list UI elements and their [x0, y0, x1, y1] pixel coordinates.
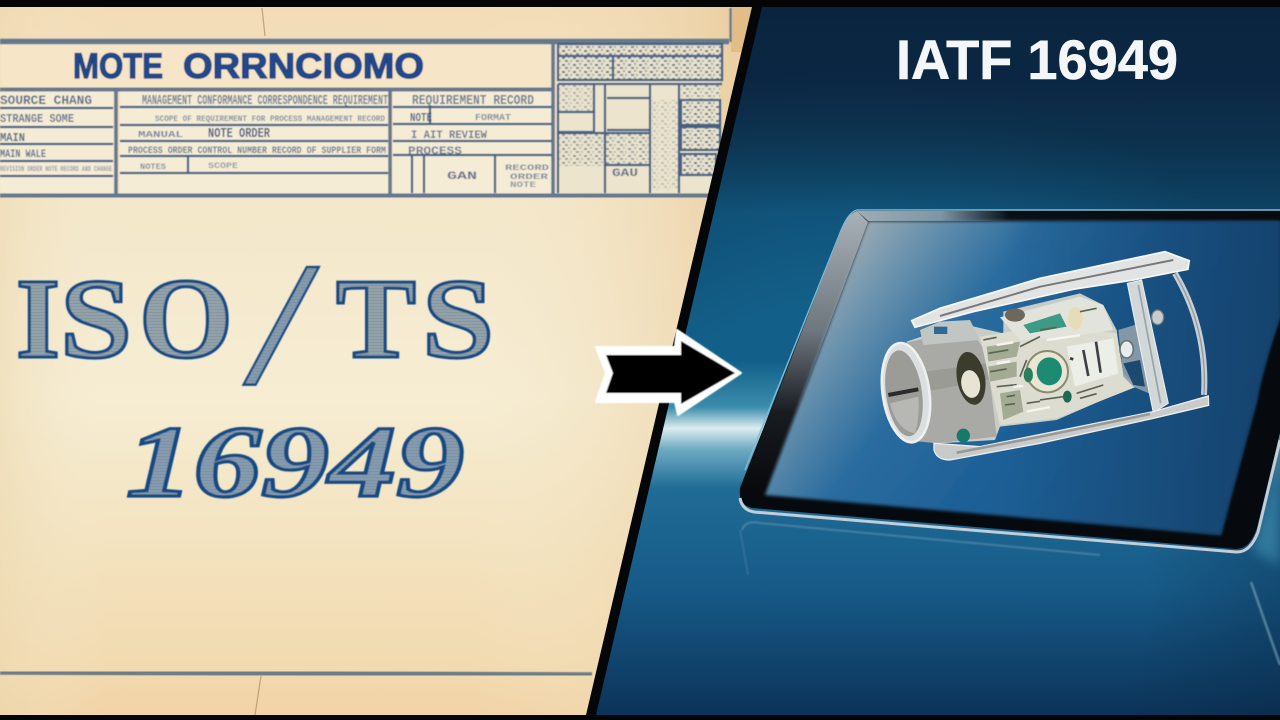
form title: MOTE [73, 47, 163, 86]
form small text: MANUAL [138, 130, 183, 140]
form small text: STRANGE SOME [0, 112, 74, 126]
panel: old paper document [0, 7, 770, 715]
light patch beside the tablet corner [1252, 450, 1280, 565]
divider: black diagonal edge [586, 7, 762, 715]
form small text: GAN [447, 171, 477, 183]
back hoop [1175, 273, 1204, 395]
slash: / [236, 227, 327, 422]
form small text: PROCESS [408, 146, 462, 158]
tablet screen [765, 221, 1280, 535]
white connector blocks [1067, 338, 1118, 387]
heading: IATF 16949: IATF 16949 [896, 28, 1178, 91]
circuit board section [980, 327, 1137, 425]
form small text: RECORD [505, 164, 549, 173]
form small text: I AIT REVIEW [411, 130, 487, 142]
tablet reflection on the floor [740, 522, 1280, 665]
arrow: from ISO/TS to IATF [596, 330, 741, 415]
panel: blue digital background [590, 7, 1280, 715]
vertical bar [1127, 280, 1168, 413]
bottom rail [934, 396, 1209, 460]
bottom black bar [0, 715, 1280, 720]
form small text: ORDER [510, 173, 548, 182]
lens ring [876, 340, 936, 445]
heading: ISO / TS: O [139, 255, 233, 382]
body shell [907, 293, 1133, 443]
form small text: FORMAT [475, 113, 512, 123]
form small text: MAIN WALE [0, 149, 46, 161]
form small text: GAU [612, 168, 638, 180]
circuit speckle [983, 308, 1103, 405]
heading: ISO / TS: S [60, 255, 132, 382]
top rail strut [920, 320, 980, 345]
form cell backgrounds [0, 44, 720, 193]
form small text: SCOPE OF REQUIREMENT FOR PROCESS MANAGEMENT RECORD [155, 115, 385, 124]
silver frame bottom and right [740, 440, 1280, 552]
form ruling lines [0, 8, 730, 196]
right bracket [1118, 323, 1157, 397]
arrow black fill [606, 341, 735, 404]
form small text [0, 93, 638, 190]
screen right shading [765, 221, 1280, 535]
form header band [0, 44, 552, 88]
form small text: SCOPE [208, 162, 238, 171]
tablet bezel [740, 210, 1280, 549]
form small text: REVISION ORDER NOTE RECORD AND CHANGE [0, 166, 112, 174]
form table at top of the paper [0, 8, 730, 196]
form small text: MANAGEMENT CONFORMANCE CORRESPONDENCE REQUIREMENT [142, 93, 388, 109]
paper bottom rule [0, 672, 592, 675]
small green dot [957, 429, 970, 443]
mechanical device on the screen [876, 252, 1209, 460]
heading: ISO / TS: S [422, 255, 494, 382]
form small text: NOTE ORDER [208, 126, 270, 142]
central green disc [1027, 351, 1068, 392]
heading: ISO / TS: I [16, 255, 60, 382]
form right block speckled cells [558, 45, 721, 190]
top light edge [745, 210, 1280, 470]
top rail [912, 252, 1189, 327]
form title [73, 47, 424, 86]
bezel left highlight [741, 211, 868, 495]
top black bar [0, 0, 1280, 7]
arrow white outline [596, 330, 741, 415]
heading: ISO / TS: T [336, 255, 416, 382]
form small text: NOTES [140, 163, 166, 172]
bezel top highlight [857, 211, 1280, 221]
form title: ORRNCIOMO [183, 47, 424, 86]
form small text: SOURCE CHANG [0, 93, 92, 108]
lens barrel [897, 328, 997, 443]
heading: 16949: 16949 [126, 406, 464, 519]
form small text: MAIN [0, 131, 25, 145]
heading: ISO / TS [16, 227, 494, 422]
form small text: REQUIREMENT RECORD [412, 93, 534, 109]
tablet [740, 210, 1280, 552]
dark sensor with white oval [953, 350, 989, 407]
form small text: NOTE [510, 181, 536, 190]
form small text: NOTE [410, 111, 432, 125]
form small text: PROCESS ORDER CONTROL NUMBER RECORD OF SUPPLIER FORM [128, 146, 386, 157]
